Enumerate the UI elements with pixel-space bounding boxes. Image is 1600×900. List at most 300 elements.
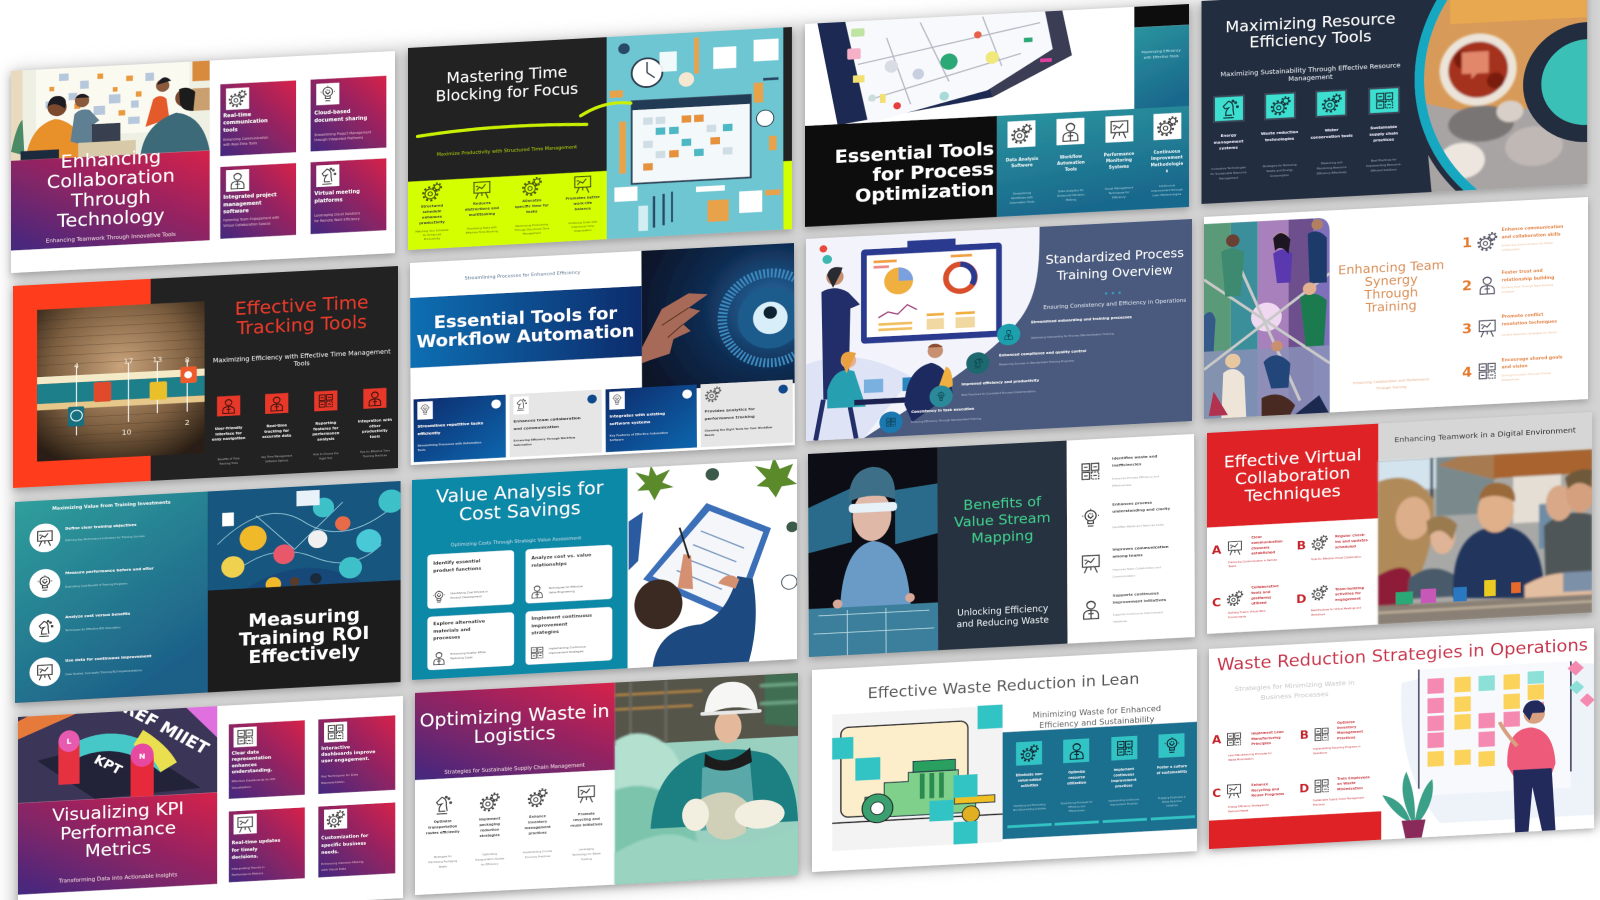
illustration: timeline on wood: 8 bbox=[185, 355, 190, 364]
teal panel: with Effective Tools bbox=[1144, 54, 1179, 60]
card: customization: needs. bbox=[321, 849, 339, 856]
subtitle: Streamlining Processes for Enhanced Efficiency bbox=[465, 270, 581, 282]
tool labels: Techniques for bbox=[1108, 190, 1130, 195]
card: customization bbox=[318, 802, 395, 878]
card: alternative materials: Reducing Costs bbox=[451, 655, 473, 660]
step 2: Measure performance before and after bbox=[65, 566, 154, 575]
subtitle: Tools bbox=[293, 360, 310, 368]
feature labels: accurate data bbox=[262, 434, 292, 439]
tool labels: Visual Management bbox=[1105, 185, 1134, 191]
feature strip: work-life bbox=[573, 201, 593, 206]
item A: Waste Minimization bbox=[1228, 757, 1254, 762]
title panel bbox=[11, 145, 210, 251]
title panel: Visualizing KPI bbox=[52, 799, 184, 826]
card: interactive dashboards bbox=[318, 715, 395, 794]
illustration: planning wall of sticky notes bbox=[1382, 660, 1595, 840]
step labels: Economy Practices bbox=[525, 854, 551, 859]
title panel: Technology bbox=[56, 206, 165, 232]
card: essential functions: product functions bbox=[433, 566, 481, 574]
title: Tracking Tools bbox=[236, 312, 367, 339]
card: customization: Customization for bbox=[321, 833, 369, 842]
title panel: Collaboration bbox=[47, 166, 175, 193]
card: team collaboration: Enhancing Efficiency Through Workflow bbox=[514, 436, 576, 443]
resource labels: Best Practices for bbox=[1371, 158, 1397, 163]
item A: established bbox=[1251, 551, 1276, 556]
panel: slide Essential Tools for Process Optimization bbox=[805, 4, 1189, 227]
feature labels: User-friendly bbox=[215, 426, 243, 431]
resource labels: Efficiency Effectively bbox=[1317, 170, 1347, 175]
benefit list: Measuring Success in Standardized Training Programs bbox=[999, 359, 1075, 366]
title block: Collaboration bbox=[1235, 463, 1350, 488]
resource labels: supply chain bbox=[1369, 130, 1398, 137]
feature labels: Reporting bbox=[315, 421, 337, 426]
step labels: management bbox=[524, 825, 551, 830]
footer note: Through Training bbox=[1375, 385, 1406, 390]
feature strip: Structured bbox=[421, 204, 444, 209]
title block bbox=[937, 441, 1068, 650]
feature strip: Achieving Goals with bbox=[568, 220, 597, 225]
tool labels: s bbox=[1166, 168, 1169, 173]
title panel: Through bbox=[70, 187, 151, 212]
feature strip: schedule bbox=[423, 209, 442, 214]
title panel: Enhancing Teamwork Through Innovative Tools bbox=[46, 232, 176, 244]
card: alternative materials: materials and bbox=[433, 627, 470, 635]
card: essential functions: Identifying Cost Drivers in bbox=[451, 589, 488, 595]
numbered item 3: 3 bbox=[1462, 322, 1472, 338]
tool labels: Streamlining bbox=[1013, 191, 1031, 195]
numbered item 2: relationship building bbox=[1502, 275, 1554, 283]
card: customization: Enhancing Decision-Making bbox=[321, 860, 364, 866]
feature labels: How to Choose the bbox=[313, 451, 339, 456]
feature strip: Prioritizing Tasks with bbox=[467, 225, 497, 231]
step labels: strategies bbox=[480, 833, 500, 838]
resource labels: conservation tools bbox=[1311, 133, 1353, 140]
item C: tools and bbox=[1251, 590, 1271, 595]
title: Synergy bbox=[1365, 272, 1418, 289]
benefit list: Enhanced compliance and quality control bbox=[999, 349, 1086, 357]
item D: Workshops bbox=[1311, 612, 1326, 617]
feature labels: tracking for bbox=[264, 429, 289, 434]
card: analytics: Needs bbox=[705, 433, 715, 437]
step labels: inventory bbox=[528, 820, 548, 825]
card: essential functions: Identify essential bbox=[433, 559, 481, 567]
card: cost vs value: relationships bbox=[531, 561, 567, 569]
step labels: Leveraging bbox=[579, 847, 594, 852]
title: Waste Reduction Strategies in Operations bbox=[1217, 636, 1588, 676]
card: virtual meeting platforms: Virtual meeting bbox=[314, 189, 360, 197]
title block: Optimization bbox=[855, 179, 994, 207]
illustration: worker sorting waste bbox=[615, 673, 798, 885]
numbered item 4: Driving Innovation Through Diverse bbox=[1502, 371, 1551, 378]
title panel bbox=[415, 683, 615, 780]
benefit 3: among teams bbox=[1112, 552, 1143, 559]
resource labels: Consumption bbox=[1270, 173, 1289, 178]
resource labels: systems bbox=[1219, 145, 1239, 151]
step labels: Waste bbox=[439, 864, 447, 869]
panel: slide Waste Reduction Strategies in Operations bbox=[1209, 628, 1595, 849]
blue panel: Streamlining Processes for bbox=[1061, 801, 1093, 806]
benefit 2: understanding and clarity bbox=[1112, 506, 1171, 514]
title: Mastering Time bbox=[446, 63, 567, 87]
benefit list: Ensuring Efficiency Through Standardized Training bbox=[911, 416, 981, 424]
card: virtual meeting platforms: Leveraging Cloud Solutions bbox=[314, 212, 360, 218]
card: integrates software: Key Features of Effective Automation bbox=[610, 431, 668, 438]
item C: C bbox=[1212, 786, 1221, 800]
item D: Practices bbox=[1313, 802, 1325, 807]
title panel: Optimizing Waste in bbox=[420, 701, 610, 732]
benefit 3: Improves communication bbox=[1112, 544, 1169, 552]
feature labels: Tracking Tools bbox=[219, 461, 239, 466]
card: clear data representation bbox=[229, 720, 305, 799]
tool labels: Data Analytics for bbox=[1058, 188, 1085, 193]
feature labels: interface for bbox=[215, 431, 242, 436]
benefit 1: Identifies waste and bbox=[1112, 454, 1158, 461]
card: virtual meeting platforms bbox=[311, 158, 386, 234]
blue panel: utilization bbox=[1067, 781, 1087, 785]
step 4: Use data for continuous improvement bbox=[65, 653, 152, 663]
card: real-time communication: Enhancing Communication bbox=[223, 136, 268, 142]
feature labels: productivity bbox=[362, 429, 388, 434]
item A: Implement Lean bbox=[1251, 730, 1284, 736]
step labels: Technology for Waste bbox=[572, 851, 601, 857]
step labels: Implementing Circular bbox=[523, 849, 553, 854]
step 3 bbox=[29, 609, 131, 643]
card: continuous improvement: Implement continuous bbox=[531, 613, 592, 622]
feature icons bbox=[217, 388, 386, 416]
title block: Effective Virtual bbox=[1224, 445, 1361, 472]
card: cloud-based document sharing: Cloud-based bbox=[314, 109, 351, 116]
numbered item 3 bbox=[1462, 311, 1558, 339]
feature strip: Matching Your Schedule bbox=[415, 228, 449, 234]
accent block bbox=[13, 279, 151, 488]
feature labels: Real-time bbox=[267, 423, 287, 428]
card: streamlines tasks: Streamlines repetitive tasks bbox=[417, 421, 484, 429]
benefit 3: Improves Team Collaboration and bbox=[1113, 565, 1161, 572]
benefit 2 bbox=[1082, 499, 1171, 531]
card: integrated project management: software bbox=[223, 208, 249, 215]
feature strip bbox=[408, 171, 607, 250]
numbered item 1: and collaboration skills bbox=[1502, 231, 1561, 240]
card: team collaboration: Enhances team collaboration bbox=[513, 416, 581, 424]
card: continuous improvement: improvement bbox=[531, 621, 568, 629]
card: cloud-based document sharing: through Integrated Platforms bbox=[314, 136, 363, 142]
step 1: Define clear training objectives bbox=[65, 522, 137, 531]
title block: Mapping bbox=[971, 528, 1033, 547]
title: Value Analysis for bbox=[436, 478, 604, 507]
title panel: Strategies for Sustainable Supply Chain Management bbox=[444, 763, 585, 776]
tool labels: Improvement through bbox=[1151, 187, 1183, 193]
card: customization: specific business bbox=[321, 841, 366, 849]
blue panel: Effectiveness bbox=[1069, 809, 1085, 813]
illustration: team climbing poles bbox=[1204, 210, 1330, 419]
feature strip: tasks bbox=[526, 210, 537, 214]
item C: Environments bbox=[1228, 615, 1247, 619]
illustration: connected data nodes bbox=[208, 481, 403, 595]
card: real-time communication: communication bbox=[223, 118, 268, 127]
illustration: timeline on wood: 13 bbox=[152, 355, 163, 364]
card: real-time updates: Performance Metrics bbox=[232, 871, 264, 877]
benefit 3 bbox=[1082, 544, 1169, 580]
subtitle: Ensuring Consistency and Efficiency in Operations bbox=[1043, 298, 1186, 311]
item B bbox=[1297, 533, 1368, 562]
feature strip: Allocates bbox=[522, 199, 541, 203]
card: alternative materials bbox=[427, 612, 514, 670]
resource labels bbox=[1211, 124, 1401, 181]
blue panel: activities bbox=[1021, 783, 1038, 788]
card: integrated project management: Virtual Collaboration Spaces bbox=[223, 222, 271, 228]
item A: Manufacturing bbox=[1251, 736, 1281, 741]
feature labels: features for bbox=[313, 426, 339, 431]
item A bbox=[1212, 729, 1284, 763]
subtitle: Maximize Productivity with Structured Time Management bbox=[437, 144, 577, 158]
tool labels: Data Analysis bbox=[1006, 156, 1039, 162]
benefit 2: Identifies Waste and Reduces Costs bbox=[1112, 523, 1164, 529]
numbered item 3: Promote conflict bbox=[1502, 312, 1543, 320]
card: integrated project management: management bbox=[223, 200, 262, 208]
step 4 bbox=[29, 652, 152, 687]
resource labels: Sustainable bbox=[1370, 124, 1397, 130]
item A: A bbox=[1212, 733, 1221, 747]
panel: slide Optimizing Waste in Logistics bbox=[415, 673, 798, 895]
resource labels: practices bbox=[1373, 137, 1395, 143]
tool icons bbox=[1008, 113, 1181, 148]
title panel: Transforming Data into Actionable Insights bbox=[58, 872, 178, 885]
card: interactive dashboards: user engagement. bbox=[321, 756, 370, 764]
footer note: Enhancing Collaboration and Performance bbox=[1353, 377, 1429, 385]
subtitle: Optimizing Costs Through Strategic Value Assessment bbox=[451, 535, 581, 548]
numbered item 3: resolution techniques bbox=[1502, 319, 1557, 327]
tool labels: Systems bbox=[1109, 164, 1130, 170]
card: real-time communication: tools bbox=[223, 127, 238, 134]
feature strip: for Enhanced bbox=[423, 232, 442, 237]
illustration: signing a checklist bbox=[629, 455, 798, 668]
tool labels: Workflows with bbox=[1011, 195, 1033, 200]
numbered item 1: Enhancing Communication for Better bbox=[1502, 241, 1554, 247]
blue panel: Improvement Practices bbox=[1110, 802, 1138, 807]
blue panel: Engaging Employees in bbox=[1158, 796, 1187, 800]
title band: Essential Tools for bbox=[434, 304, 618, 333]
item D bbox=[1299, 775, 1370, 808]
card: streamlines tasks bbox=[413, 395, 506, 462]
benefit 2: Enhances process bbox=[1112, 500, 1153, 507]
blue panel: Optimize bbox=[1068, 770, 1086, 775]
card: integrated project management bbox=[220, 163, 296, 239]
illustration: timeline on wood: 2 bbox=[185, 418, 190, 427]
numbered item 4: Encourage shared goals bbox=[1502, 354, 1563, 363]
item C: utilized bbox=[1251, 601, 1267, 606]
item C: Building Trust in Virtual Work bbox=[1228, 609, 1266, 615]
title block: and Reducing Waste bbox=[957, 616, 1049, 630]
feature strip: Promotes better bbox=[565, 195, 600, 201]
numbered item 4: and vision bbox=[1502, 363, 1528, 370]
card: continuous improvement: Improvement Strategies bbox=[549, 649, 584, 655]
item D: Best Practices for Virtual Meetings and bbox=[1311, 606, 1362, 612]
item A: Lean Manufacturing Principles for bbox=[1228, 751, 1273, 757]
numbered item 1 bbox=[1462, 224, 1563, 254]
feature labels: Key Time Management bbox=[261, 454, 292, 459]
panel: slide Benefits of Value Stream Mapping bbox=[808, 434, 1195, 657]
blue panel: Foster a culture bbox=[1157, 764, 1188, 770]
step labels: transportation bbox=[428, 824, 458, 830]
numbered item 4: 4 bbox=[1462, 365, 1472, 381]
card: streamlines tasks: Streamlining Processes with Automation bbox=[418, 441, 481, 448]
step 2 bbox=[29, 563, 154, 599]
panel: slide Value Analysis for Cost Savings bbox=[412, 455, 798, 680]
item D: activities for bbox=[1335, 591, 1361, 597]
title: Training Overview bbox=[1056, 262, 1173, 283]
resource labels: Management bbox=[1219, 176, 1239, 181]
card: real-time updates: decisions. bbox=[232, 854, 258, 861]
tool labels: Tools bbox=[1065, 166, 1078, 172]
illustration: KPI gauge: KPT bbox=[91, 753, 124, 778]
illustration: timeline on wood: 17 bbox=[124, 356, 134, 366]
resource labels: for Sustainable Resource bbox=[1211, 170, 1247, 176]
card: analytics: Provides analytics for bbox=[704, 406, 755, 414]
benefit list: Improved efficiency and productivity bbox=[961, 378, 1040, 386]
subtitle: Business Processes bbox=[1261, 690, 1329, 701]
blue panel: Non-Value-Adding Activities bbox=[1013, 807, 1047, 812]
card: real-time updates: Interpreting Trends in bbox=[232, 865, 265, 871]
card: clear data representation: understanding. bbox=[232, 768, 273, 776]
feature strip: multitasking bbox=[469, 212, 496, 217]
feature labels: Integration with bbox=[358, 418, 392, 424]
card: streamlines tasks: efficiently bbox=[417, 430, 441, 436]
blue panel: Eliminate non- bbox=[1016, 772, 1044, 777]
item B: Optimize bbox=[1337, 720, 1356, 725]
feature strip: distractions and bbox=[465, 206, 499, 212]
step labels: Strategies for bbox=[434, 854, 453, 859]
step labels: Optimizing bbox=[482, 852, 497, 857]
illustration: team around colourful blocks bbox=[1378, 449, 1595, 625]
title block: Training ROI bbox=[239, 623, 369, 650]
resource labels: management bbox=[1214, 138, 1244, 145]
card: cost vs value: Analyze cost vs. value bbox=[531, 553, 591, 562]
accent bar bbox=[1209, 811, 1381, 849]
panel: slide Mastering Time Blocking for Focus bbox=[408, 27, 792, 250]
item C: Enhance bbox=[1251, 782, 1269, 787]
blue panel bbox=[1003, 722, 1197, 839]
feature strip: Management bbox=[523, 231, 541, 236]
item C: C bbox=[1212, 596, 1221, 610]
card: interactive dashboards: Key Techniques for Data bbox=[321, 773, 358, 779]
resource labels: Waste reduction bbox=[1261, 129, 1298, 136]
item C: Energy Efficiency Strategies for bbox=[1228, 803, 1270, 809]
item A: Enhancing Communication in Remote bbox=[1228, 558, 1277, 564]
benefit 1: inefficiencies bbox=[1112, 461, 1142, 468]
resource labels: Energy bbox=[1221, 132, 1237, 138]
subtitle: Management bbox=[1288, 73, 1333, 83]
title: Cost Savings bbox=[459, 499, 581, 525]
subtitle: Maximizing Sustainability Through Effective Resource bbox=[1220, 62, 1401, 79]
benefit 4: improvement initiatives bbox=[1113, 597, 1167, 605]
title panel: Metrics bbox=[85, 839, 151, 862]
item A: Teams bbox=[1228, 564, 1237, 569]
numbered item 2: Activities bbox=[1502, 290, 1515, 294]
item C bbox=[1212, 584, 1279, 620]
step 4: Case Studies: Successful Training ROI Implementations bbox=[65, 668, 143, 676]
item A: Principles bbox=[1251, 741, 1271, 746]
tool labels: Performance bbox=[1104, 151, 1134, 157]
item C: platforms bbox=[1251, 595, 1271, 600]
card: real-time updates: Real-time updates bbox=[232, 838, 281, 846]
numbered item 3: Conflict Resolution Strategies for Teams bbox=[1502, 330, 1558, 337]
benefit list: Streamlined onboarding and training processes bbox=[1031, 315, 1132, 324]
feature labels: performance bbox=[312, 431, 340, 437]
resource labels: Implementing Resource- bbox=[1366, 162, 1401, 168]
card: integrated project management: Integrated project bbox=[223, 192, 277, 201]
illustration: KPI gauge: REF MIIET bbox=[120, 698, 213, 758]
title band: Workflow Automation bbox=[417, 322, 634, 352]
card: cloud-based document sharing: document sharing bbox=[314, 115, 368, 124]
title: Maximizing Resource bbox=[1225, 10, 1396, 36]
feature strip: productivity bbox=[419, 220, 445, 225]
title panel: Enhancing bbox=[61, 147, 161, 173]
numbered item 2 bbox=[1462, 268, 1554, 296]
item D: on Waste bbox=[1337, 781, 1356, 786]
card: essential functions: Product Development bbox=[451, 594, 483, 600]
feature strip: enhances bbox=[422, 215, 442, 220]
title block: Essential Tools bbox=[835, 139, 994, 168]
step labels: routes efficiently bbox=[426, 830, 460, 835]
numbered item 1: Collaboration bbox=[1502, 247, 1520, 252]
benefit 1: Effectiveness bbox=[1112, 483, 1132, 487]
item A: A bbox=[1212, 543, 1222, 557]
top band with subtitle: Enhancing Teamwork in a Digital Environment bbox=[1394, 426, 1576, 444]
benefit list: Best Practices for Consistent Process Implementation bbox=[961, 389, 1036, 397]
teal panel bbox=[412, 468, 628, 680]
top band with subtitle bbox=[1378, 412, 1592, 461]
illustration: woman with visor and screens bbox=[808, 447, 938, 657]
blue panel: continuous bbox=[1113, 773, 1134, 778]
title: Blocking for Focus bbox=[436, 80, 578, 106]
item B: Practices bbox=[1337, 735, 1355, 740]
illustration: circular resource photo bbox=[1414, 0, 1588, 192]
card: interactive dashboards: Representation bbox=[321, 780, 345, 785]
feature strip: specific time for bbox=[515, 204, 549, 209]
item B: B bbox=[1297, 538, 1306, 552]
feature strip: balance bbox=[575, 207, 591, 211]
feature labels: tools bbox=[370, 435, 380, 439]
card: interactive dashboards: Interactive bbox=[321, 744, 350, 752]
blue panel: Implement bbox=[1114, 767, 1134, 772]
numbered item 2: Foster trust and bbox=[1502, 268, 1543, 276]
tool labels: Continuous bbox=[1159, 183, 1176, 188]
blue panel: practices bbox=[1115, 783, 1133, 788]
item B: ins and updates bbox=[1335, 538, 1368, 544]
panel: slide Essential Tools for Workflow Automation bbox=[410, 242, 819, 465]
item D: Sustainable Supply Chain Management bbox=[1313, 796, 1364, 803]
item B: Implementing Recycling Programs in bbox=[1313, 745, 1361, 751]
illustration: KPI gauge: N bbox=[139, 752, 145, 761]
feature labels: easy navigation bbox=[212, 436, 246, 442]
blue panel: Implementing Continuous bbox=[1108, 798, 1140, 803]
item B: Inventory bbox=[1337, 725, 1357, 730]
card: team collaboration: Automation bbox=[514, 442, 532, 447]
item D: engagement bbox=[1335, 597, 1361, 602]
feature labels bbox=[212, 418, 392, 466]
step labels: Optimize bbox=[434, 819, 452, 824]
card: real-time communication: Real-time bbox=[223, 112, 252, 119]
benefit 3: Communication bbox=[1113, 574, 1136, 579]
illustration: calendar desk flat lay bbox=[607, 27, 792, 239]
benefit list bbox=[879, 315, 1132, 434]
tool labels: Monitoring bbox=[1106, 157, 1132, 164]
panel: slide Measuring Training ROI Effectively bbox=[15, 481, 403, 703]
tool labels: Automation Tools bbox=[1010, 199, 1035, 205]
panel: slide Effective Time Tracking Tools bbox=[13, 266, 398, 488]
item D: D bbox=[1299, 781, 1309, 795]
item B: B bbox=[1300, 728, 1309, 742]
